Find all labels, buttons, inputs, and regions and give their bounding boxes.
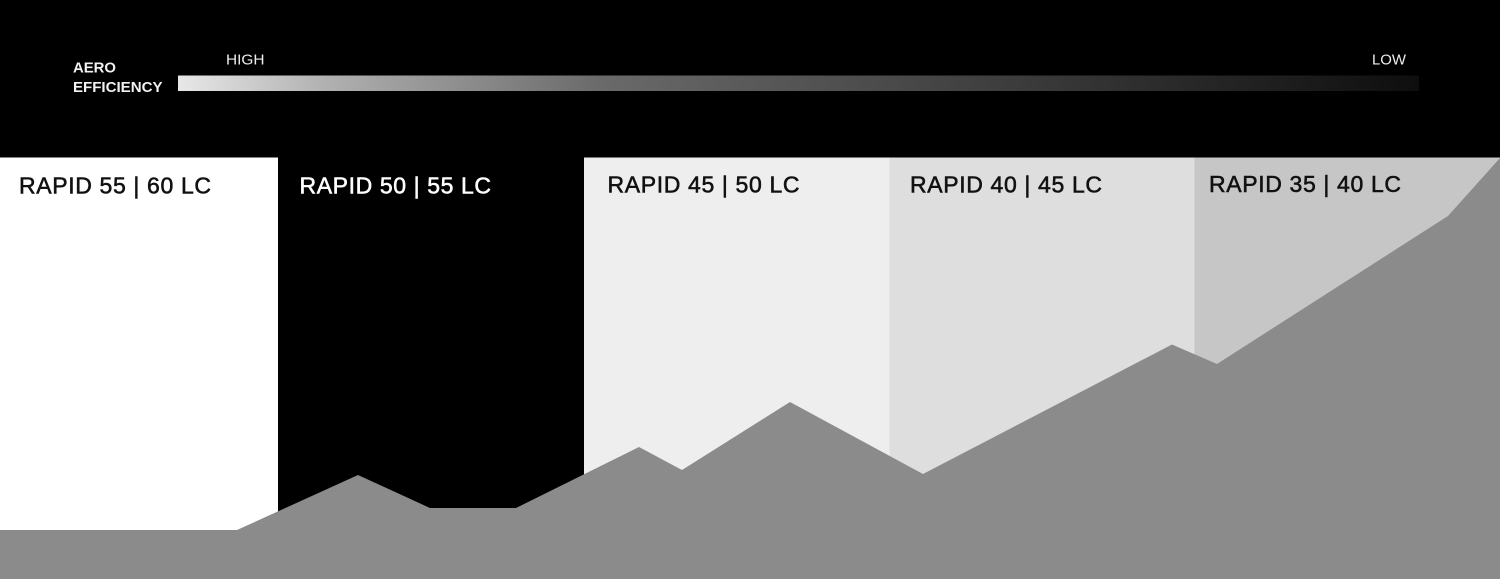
panel: rapid 35/40 xyxy=(1194,158,1500,579)
terrain: elevation profile xyxy=(0,158,1500,579)
panel heading: RAPID 45 | 50 LC xyxy=(608,172,800,198)
panel: rapid 40/45 xyxy=(890,158,1194,579)
panel: rapid 45/50 xyxy=(584,158,890,579)
label: high: HIGH xyxy=(226,52,264,68)
label: low: LOW xyxy=(1372,52,1407,68)
legend: aero efficiency xyxy=(73,52,1419,96)
panel: rapid 55/60 xyxy=(0,158,278,579)
legend title: AERO xyxy=(73,60,116,76)
panel: rapid 50/55 xyxy=(278,158,584,579)
panel heading: RAPID 55 | 60 LC xyxy=(19,172,211,198)
gradient bar xyxy=(178,76,1419,91)
panel heading: RAPID 50 | 55 LC xyxy=(300,172,491,198)
panel heading: RAPID 40 | 45 LC xyxy=(910,172,1102,198)
panel heading: RAPID 35 | 40 LC xyxy=(1209,171,1401,197)
legend title: EFFICIENCY xyxy=(73,80,163,96)
